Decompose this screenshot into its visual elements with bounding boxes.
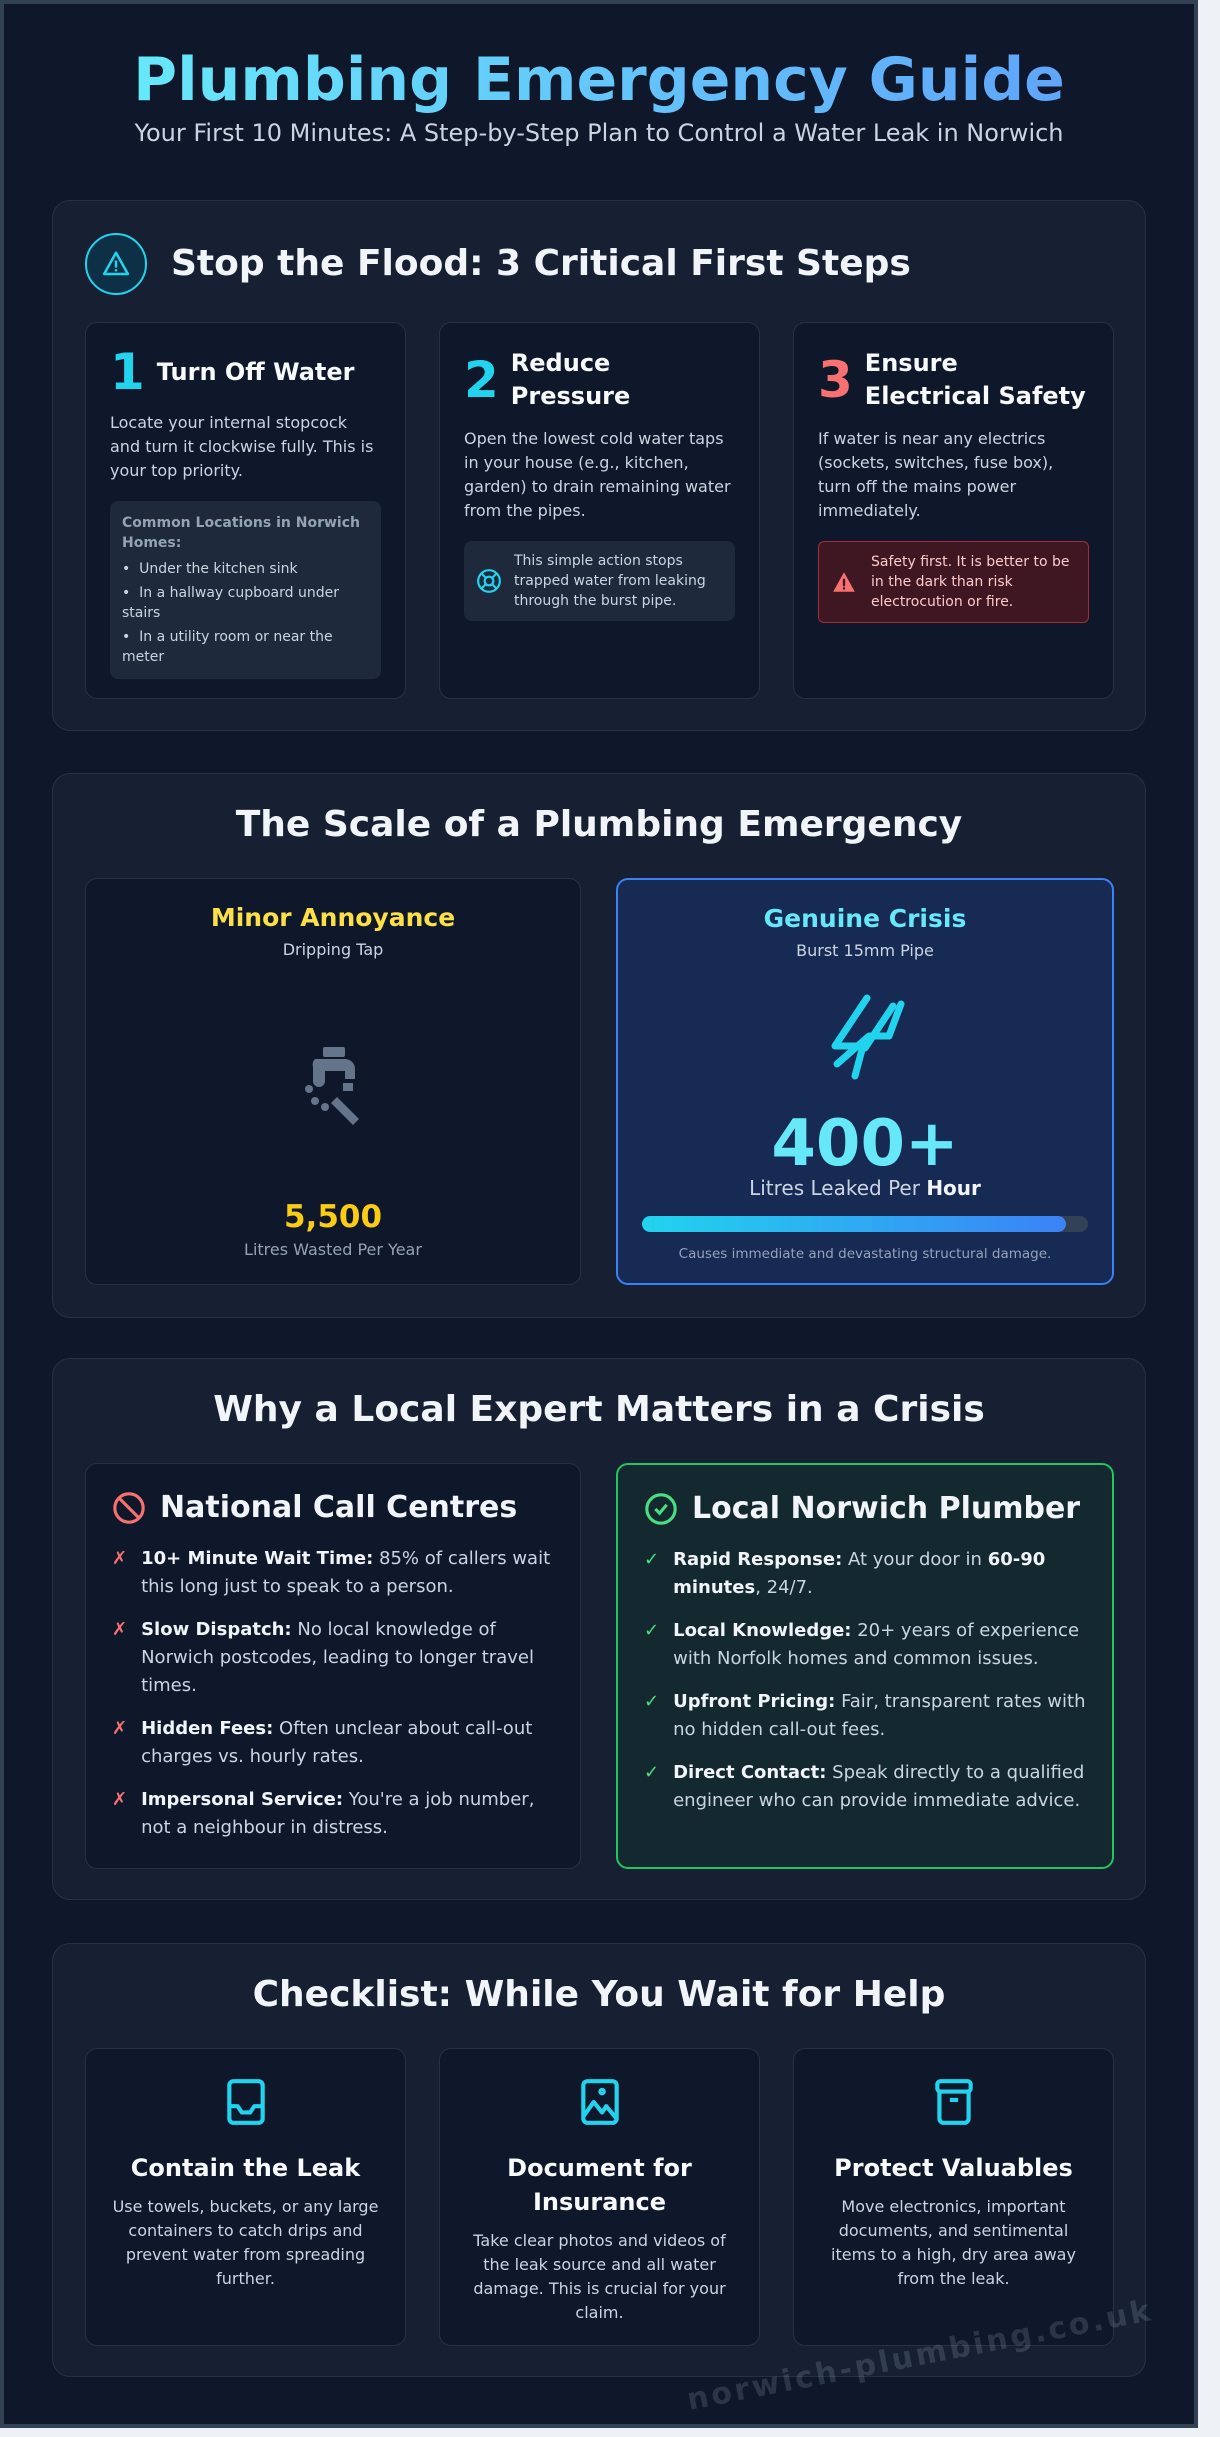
card: step 3: Electrical Safety [865,382,1086,410]
card: step 3: If water is near any electrics (sockets, switches, fuse box), turn off the mains power immediately. [818,429,1053,520]
card: local plumber: Local Norwich Plumber [692,1491,1080,1526]
card: national call centres: Impersonal Service: You're a job number, not a neighbour in distress. [141,1789,534,1838]
card: local plumber: Upfront Pricing: Fair, transparent rates with no hidden call-out fees. [673,1691,1086,1740]
card: step 3: Ensure [865,349,958,377]
icon: burst pipe bolt [832,994,904,1080]
watermark: norwich-plumbing.co.uk [684,2293,1156,2418]
heading: scale: The Scale of a Plumbing Emergency [236,804,962,845]
card: local plumber: ✓ [644,1549,659,1570]
card: national call centres: ✗ [112,1789,127,1810]
card: national call centres: 10+ Minute Wait Time: 85% of callers wait this long just to speak to a person. [141,1548,550,1597]
card: document for insurance [439,2048,760,2346]
card: step 2: Pressure [511,382,630,410]
callout: safety: Safety first. It is better to be in the dark than risk electrocution or fire. [871,554,1070,610]
panel: scale [52,773,1146,1318]
card: protect valuables: Protect Valuables [834,2154,1073,2182]
card: step 1: Turn Off Water [157,358,354,386]
card: step 3 [793,322,1114,699]
card: step 2: Reduce [511,349,610,377]
card: genuine crisis: 400+ [771,1107,959,1181]
card: step 1: 1 [110,343,145,401]
card: minor annoyance: Dripping Tap [283,940,383,959]
icon: dripping tap [305,1047,359,1125]
card: local plumber: Rapid Response: At your door in 60-90 minutes, 24/7. [673,1549,1045,1598]
card: national call centres: ✗ [112,1718,127,1739]
card: step 1 [85,322,406,699]
subtitle: Your First 10 Minutes: A Step-by-Step Plan to Control a Water Leak in Norwich [134,119,1064,147]
card: step 2 [439,322,760,699]
icon: warning circle [85,233,147,295]
box: common locations: • In a hallway cupboard under stairs [122,585,339,621]
panel: checklist [52,1943,1146,2377]
card: genuine crisis: Genuine Crisis [764,904,966,933]
card: document for insurance: Take clear photos and videos of the leak source and all water damage. This is crucial for your claim. [473,2231,726,2322]
card: national call centres: Hidden Fees: Often unclear about call-out charges vs. hourly rates. [141,1718,532,1767]
card: minor annoyance: Litres Wasted Per Year [244,1240,422,1259]
card: genuine crisis: Burst 15mm Pipe [796,941,934,960]
card: national call centres: Slow Dispatch: No local knowledge of Norwich postcodes, leading to longer travel times. [141,1619,534,1696]
callout: safety [818,541,1089,623]
card: genuine crisis [616,878,1114,1285]
card: national call centres: ✗ [112,1619,127,1640]
panel: local expert [52,1358,1146,1900]
card: genuine crisis: Causes immediate and devastating structural damage. [679,1246,1051,1262]
callout: simple action [464,541,735,621]
card: minor annoyance: Minor Annoyance [211,903,455,932]
card: local plumber: ✓ [644,1620,659,1641]
card: national call centres: ✗ [112,1548,127,1569]
card: national call centres: National Call Centres [160,1490,517,1525]
card: local plumber [616,1463,1114,1869]
title: Plumbing Emergency Guide [133,45,1065,115]
card: contain the leak [85,2048,406,2346]
box: common locations: Common Locations in Norwich Homes: [122,515,360,551]
card: protect valuables: Move electronics, important documents, and sentimental items to a high, dry area away from the leak. [831,2197,1076,2288]
card: local plumber: Direct Contact: Speak directly to a qualified engineer who can provide immediate advice. [673,1762,1084,1811]
card: national call centres [85,1463,581,1869]
heading: local expert: Why a Local Expert Matters in a Crisis [213,1389,985,1430]
card: protect valuables [793,2048,1114,2346]
box: common locations: • In a utility room or near the meter [122,629,333,665]
card: genuine crisis: Litres Leaked Per Hour [749,1176,981,1200]
heading: checklist: Checklist: While You Wait for Help [253,1974,945,2015]
card: step 2: 2 [464,351,499,409]
heading: stop the flood: Stop the Flood: 3 Critical First Steps [171,243,911,284]
progress bar [642,1216,1088,1232]
card: local plumber: ✓ [644,1762,659,1783]
card: minor annoyance [85,878,581,1285]
card: document for insurance: Document for Insurance [507,2154,692,2216]
card: contain the leak: Contain the Leak [131,2154,360,2182]
card: local plumber: Local Knowledge: 20+ years of experience with Norfolk homes and common issues. [673,1620,1079,1669]
card: step 1: Locate your internal stopcock and turn it clockwise fully. This is your top priority. [110,413,373,480]
card: local plumber: ✓ [644,1691,659,1712]
callout: simple action: This simple action stops trapped water from leaking through the burst pipe. [514,553,706,609]
box: common locations [110,501,381,679]
card: minor annoyance: 5,500 [284,1199,382,1235]
card: step 2: Open the lowest cold water taps in your house (e.g., kitchen, garden) to drain remaining water from the pipes. [464,429,731,520]
panel: first steps [52,200,1146,731]
box: common locations: • Under the kitchen sink [122,561,298,577]
card: contain the leak: Use towels, buckets, or any large containers to catch drips and prevent water from spreading further. [113,2197,378,2288]
card: step 3: 3 [818,351,853,409]
